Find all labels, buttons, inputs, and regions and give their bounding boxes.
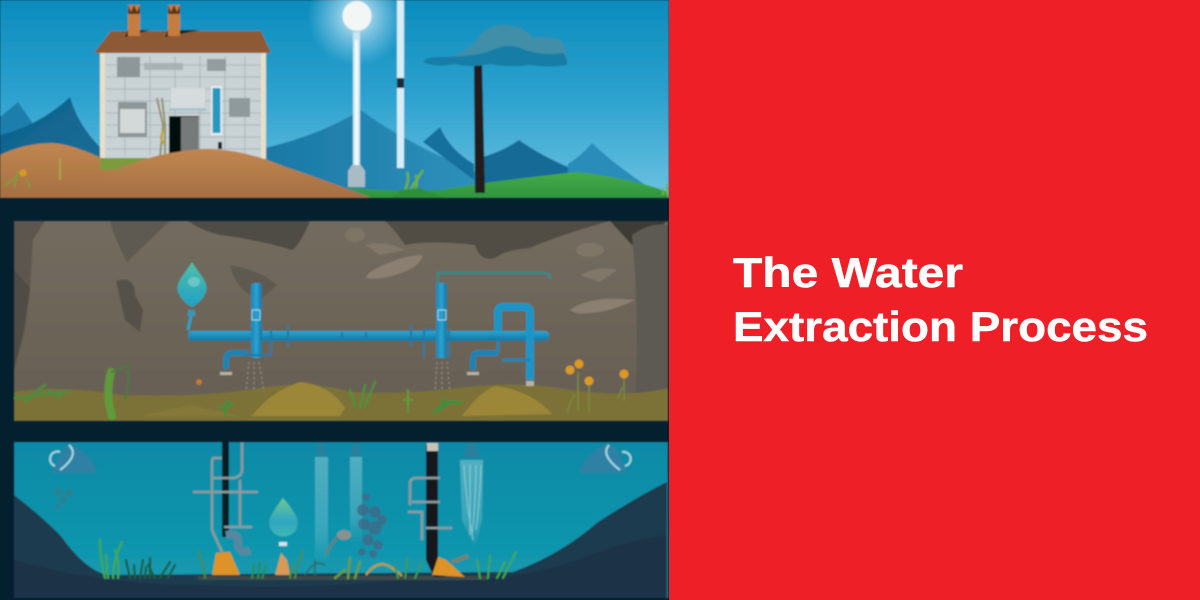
street lamp xyxy=(307,0,407,187)
water dripping xyxy=(246,362,450,392)
collars and valves xyxy=(245,325,449,358)
chimneys xyxy=(128,5,180,36)
water drop xyxy=(269,498,298,546)
seaweed and grass xyxy=(100,540,516,578)
extraction pipe right xyxy=(408,443,468,577)
thin overhead pipe xyxy=(438,273,551,283)
mounds of soil xyxy=(140,382,552,416)
seabed slopes xyxy=(14,482,667,598)
arch coral xyxy=(366,564,402,576)
pipe loop xyxy=(498,307,530,380)
lower elbows xyxy=(226,353,248,369)
showers xyxy=(315,443,483,565)
bubbles cluster xyxy=(54,488,73,510)
sky xyxy=(0,0,669,198)
panel: underground rock layer with pipes xyxy=(14,221,668,421)
water pipe system xyxy=(188,273,551,386)
house windows xyxy=(117,57,250,137)
white pole xyxy=(397,0,404,168)
title line 2: Extraction Process xyxy=(733,303,1148,350)
panel: surface scene xyxy=(0,0,669,198)
tree xyxy=(423,25,567,193)
plants on the soil xyxy=(15,367,624,416)
house door xyxy=(169,108,206,154)
hills: brown dirt xyxy=(0,143,372,198)
rock wall xyxy=(14,221,668,421)
water body xyxy=(14,442,668,598)
mushroom anemone xyxy=(326,534,340,555)
extraction pipe left xyxy=(193,442,258,575)
title xyxy=(733,249,1148,350)
title line 1: The Water xyxy=(733,249,963,296)
soil band xyxy=(14,384,668,421)
vertical riser 1 xyxy=(251,283,262,358)
small orange coral xyxy=(275,553,290,575)
house xyxy=(94,5,271,159)
house roof xyxy=(94,31,271,53)
house wall xyxy=(100,53,266,159)
panel: aquifer water layer xyxy=(14,442,668,598)
background: dark frame of the illustration xyxy=(0,0,669,600)
right lamp xyxy=(579,445,631,473)
main horizontal pipe xyxy=(188,331,549,341)
flowers xyxy=(566,360,628,386)
left lamp xyxy=(50,445,97,473)
rock highlights xyxy=(345,228,635,314)
rock shadows xyxy=(14,221,668,397)
hill: green grass xyxy=(346,172,668,198)
mountains xyxy=(0,97,650,198)
panel: red title panel xyxy=(669,0,1200,600)
outlet caps xyxy=(220,372,534,386)
ceiling lamps xyxy=(50,445,631,473)
coral plant xyxy=(357,493,387,558)
sediment floor xyxy=(198,576,488,580)
water drop xyxy=(177,262,207,330)
vertical riser 2 xyxy=(436,283,447,358)
house vine xyxy=(157,98,165,157)
plant tufts on surface xyxy=(5,158,667,198)
